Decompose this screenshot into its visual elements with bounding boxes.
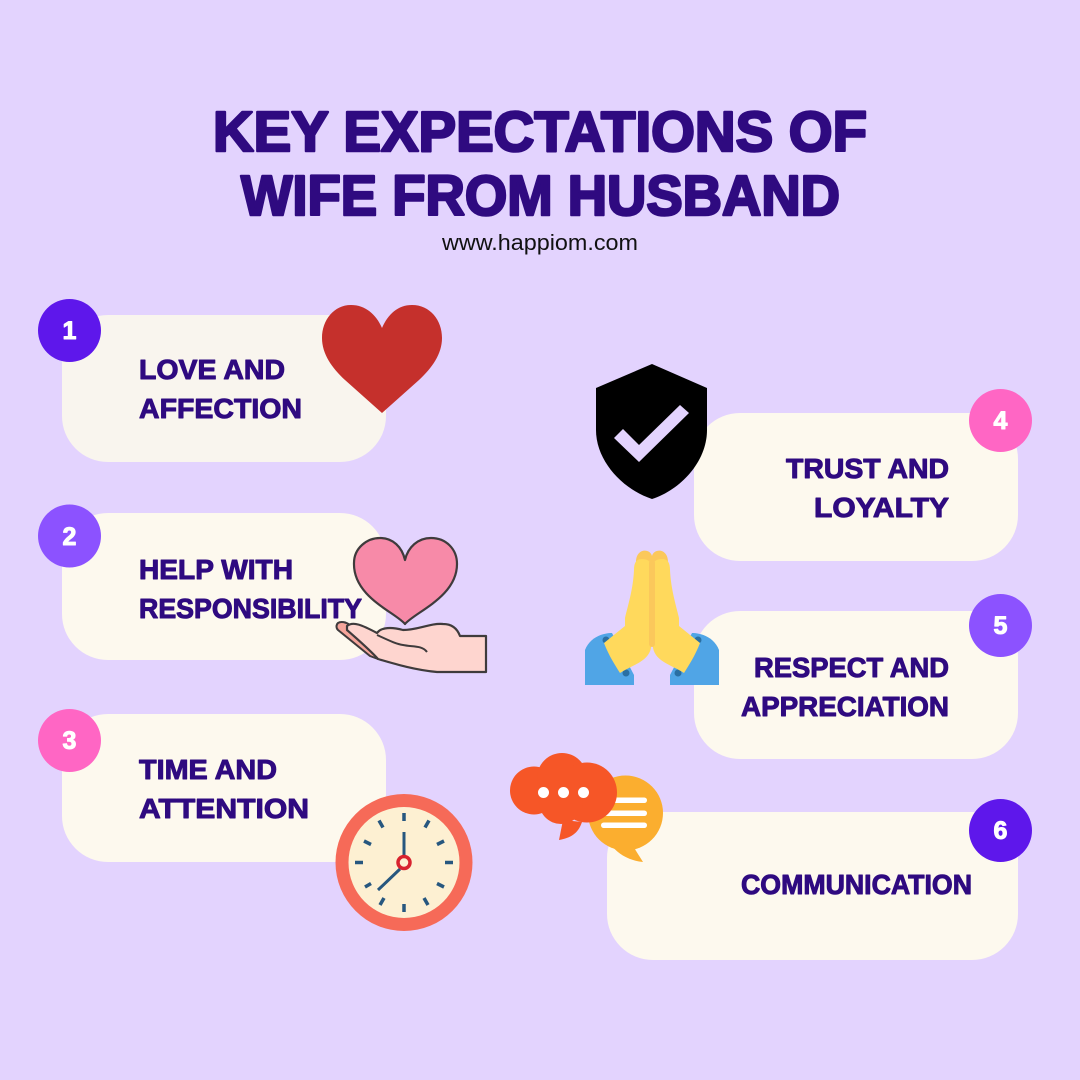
badge 5: 5 (994, 612, 1008, 640)
label: time and attention: ATTENTION (139, 793, 309, 824)
label: respect and appreciation: RESPECT AND (754, 652, 949, 683)
orange bubble (588, 776, 663, 862)
panel: respect and appreciation (694, 611, 1018, 759)
badge 3 (38, 709, 101, 772)
panel: love and affection (62, 315, 386, 462)
badge 6 (969, 799, 1032, 862)
badge 1 (38, 299, 101, 362)
icon: clock (336, 794, 472, 931)
badge 2: 2 (63, 523, 76, 551)
title (213, 100, 867, 228)
badge 2 (38, 504, 101, 568)
badge 1: 1 (63, 317, 77, 345)
label: love and affection: AFFECTION (139, 393, 302, 424)
label: respect and appreciation: APPRECIATION (741, 691, 949, 722)
panel: help with responsibility (62, 513, 386, 660)
panel: trust and loyalty (694, 413, 1018, 561)
title: WIFE FROM HUSBAND (241, 164, 840, 228)
label: communication: COMMUNICATION (741, 869, 972, 900)
label: time and attention: TIME AND (139, 754, 277, 785)
panel: time and attention (62, 714, 386, 862)
badge 5 (969, 594, 1032, 657)
icon: red heart (322, 305, 442, 413)
icon: shield with check (596, 364, 707, 499)
label: respect and appreciation (741, 652, 949, 722)
badge 6: 6 (994, 817, 1007, 845)
label: trust and loyalty (786, 453, 949, 523)
icon: praying hands (585, 551, 719, 685)
title: KEY EXPECTATIONS OF (213, 100, 867, 164)
badge 3: 3 (63, 727, 76, 755)
label: trust and loyalty: LOYALTY (814, 492, 949, 523)
label: time and attention (139, 754, 309, 824)
label: trust and loyalty: TRUST AND (786, 453, 949, 484)
label: love and affection (139, 354, 302, 424)
website url: www.happiom.com (441, 230, 638, 255)
badge 4 (969, 389, 1032, 452)
red bubble (510, 753, 617, 840)
label: love and affection: LOVE AND (139, 354, 285, 385)
panel: communication (607, 812, 1018, 960)
badge 4: 4 (994, 407, 1008, 435)
label: help with responsibility: RESPONSIBILITY (139, 593, 362, 624)
icon: speech bubbles (510, 753, 663, 862)
label: help with responsibility: HELP WITH (139, 554, 293, 585)
icon: hand holding heart (336, 538, 486, 672)
label: help with responsibility (139, 554, 362, 624)
